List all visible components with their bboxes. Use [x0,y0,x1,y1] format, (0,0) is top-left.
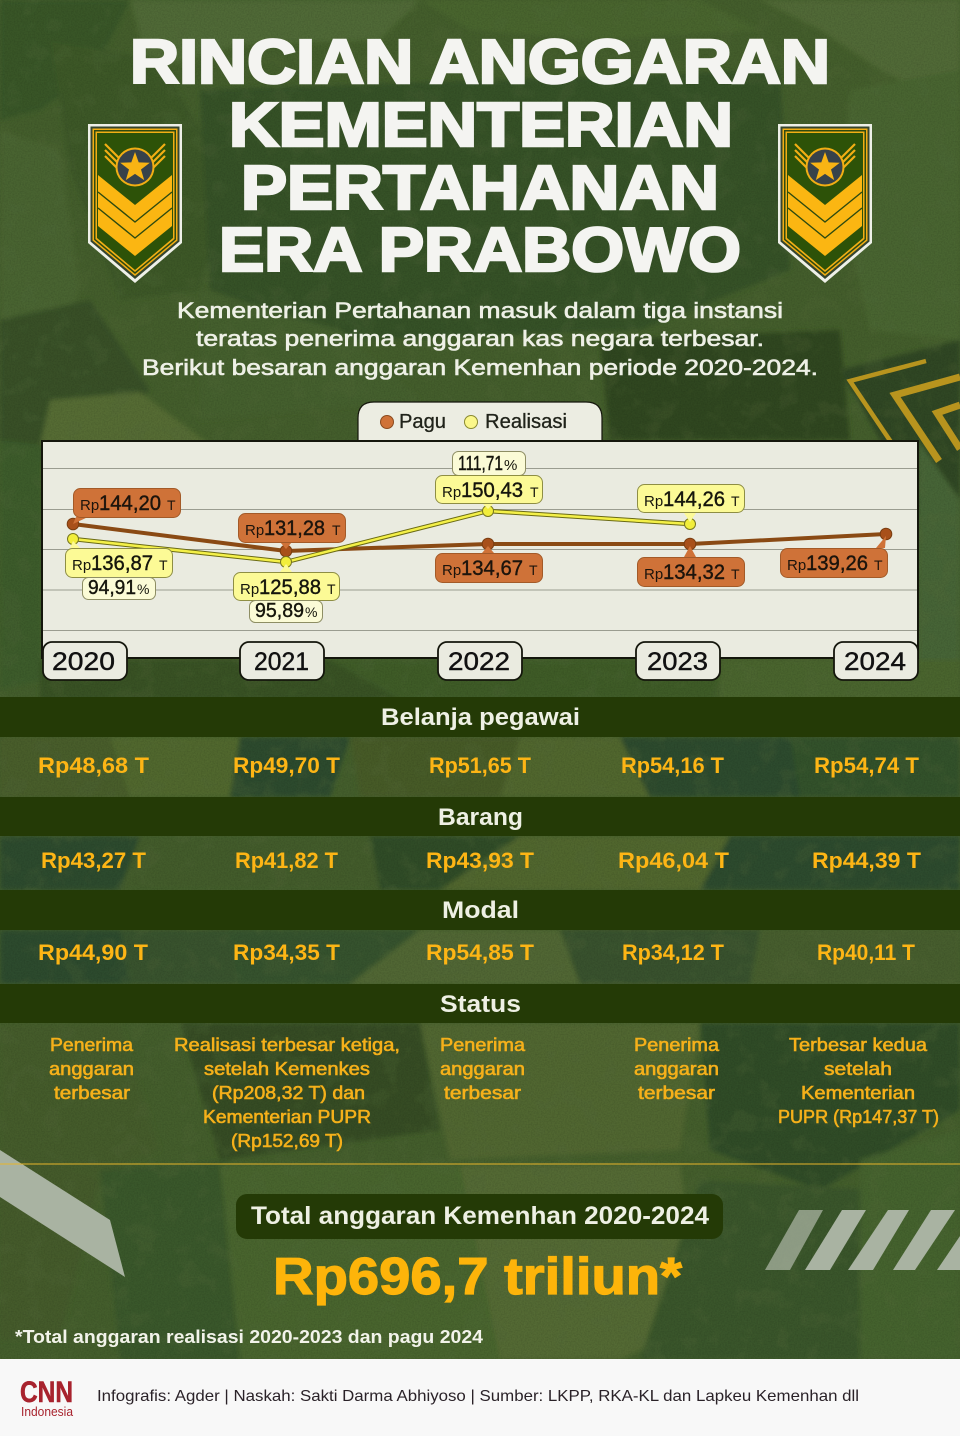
year labels: 2023 [647,648,708,676]
label: pagu 2020: T [167,497,176,513]
label: realisasi 2021: 125,88 [259,576,321,599]
label: pagu 2021: T [332,522,341,538]
label: pagu 2023: Rp [644,566,663,583]
barang values [41,848,922,873]
status text: anggaran [634,1059,719,1079]
status text: Terbesar kedua [789,1035,928,1055]
year labels: 2024 [844,648,906,676]
label: pagu 2020: 144,20 [99,492,161,515]
belanja pegawai values: Rp54,74 T [814,753,920,778]
status text: Penerima [440,1035,526,1055]
title: RINCIAN ANGGARAN [130,28,830,97]
barang values: Rp43,27 T [41,848,147,873]
realisasi markers [68,506,696,568]
label: pagu 2024: T [874,557,883,573]
logo: CNN Indonesia: Indonesia [21,1404,74,1419]
label: pagu 2023: T [731,566,740,582]
line: realisasi series [73,511,690,562]
modal values: Rp54,85 T [426,940,535,965]
label: pagu 2022 [436,546,542,582]
label: percent 2021: % [305,604,317,620]
title: ERA PRABOWO [219,216,741,285]
decorative white diagonal stripes [765,1210,960,1270]
label: percent 2022: 111,71 [458,453,503,475]
decorative gold chevrons [850,361,960,461]
legend tab: Realisasi [485,411,567,433]
credits: Infografis: Agder | Naskah: Sakti Darma Abhiyoso | Sumber: LKPP, RKA-KL dan Lapkeu Kemenhan dll [97,1388,859,1405]
barang values: Rp43,93 T [426,848,535,873]
label: percent 2022: % [504,457,517,474]
label: realisasi 2023 [638,484,744,522]
barang values: Rp44,39 T [812,848,922,873]
table section bands [0,697,960,1023]
section headings: Modal [442,897,519,924]
belanja pegawai values: Rp51,65 T [429,753,532,778]
status text: PUPR (Rp147,37 T) [778,1107,939,1127]
label: pagu 2022: Rp [442,562,461,579]
status text: anggaran [440,1059,525,1079]
label: pagu 2020: Rp [80,497,99,514]
label: pagu 2020 [73,488,180,524]
intro text: Berikut besaran anggaran Kemenhan periode 2020-2024. [142,355,818,380]
belanja pegawai values: Rp49,70 T [233,753,341,778]
title [130,28,830,285]
label: pagu 2024: Rp [787,557,806,574]
label: realisasi 2020 [66,541,172,578]
label: pagu 2022: 134,67 [461,557,523,580]
label: realisasi 2022: 150,43 [461,479,523,502]
decorative grey stripe [0,1150,125,1277]
icon: right rank badge [778,124,872,283]
label: percent 2020: % [137,581,149,597]
footer [0,1359,960,1436]
line: pagu series [73,524,886,551]
legend tab: Pagu [399,411,446,433]
label: realisasi 2020: T [159,557,168,573]
line chart panel [42,441,918,680]
logo: CNN Indonesia [20,1376,74,1419]
label: percent 2021: 95,89 [255,600,304,622]
label: realisasi 2021: T [327,581,336,597]
total pill [236,1194,723,1239]
label: pagu 2024 [780,536,888,578]
label: realisasi 2022: Rp [442,484,461,501]
label: percent 2020 [82,577,156,600]
section headings: Belanja pegawai [381,704,580,731]
intro text [142,298,818,380]
belanja pegawai values: Rp54,16 T [621,753,725,778]
modal values: Rp34,35 T [233,940,341,965]
modal values [38,940,916,965]
barang values: Rp46,04 T [618,848,730,873]
label: realisasi 2020: Rp [72,557,91,574]
label: pagu 2022: T [529,562,538,578]
total pill: Total anggaran Kemenhan 2020-2024 [251,1202,709,1230]
status text [49,1035,939,1151]
barang values: Rp41,82 T [235,848,339,873]
intro text: teratas penerima anggaran kas negara terbesar. [196,326,764,351]
title: PERTAHANAN [241,154,719,223]
label: realisasi 2022: T [530,484,539,500]
intro text: Kementerian Pertahanan masuk dalam tiga instansi [177,298,783,323]
icon: left rank badge [88,124,182,283]
status text: Realisasi terbesar ketiga, [174,1035,400,1055]
modal values: Rp34,12 T [622,940,725,965]
year labels [43,642,918,680]
status text: Penerima [50,1035,134,1055]
status text: terbesar [54,1083,130,1103]
status text: setelah [824,1059,892,1079]
status text: anggaran [49,1059,134,1079]
label: realisasi 2023: 144,26 [663,488,725,511]
modal values: Rp44,90 T [38,940,149,965]
status text: Kementerian PUPR [203,1107,371,1127]
total value: Rp696,7 triliun* [273,1248,683,1306]
year labels: 2020 [52,648,115,676]
label: pagu 2024: 139,26 [806,552,868,575]
label: realisasi 2021 [234,564,340,600]
label: realisasi 2023: Rp [644,493,663,510]
belanja pegawai values [38,753,920,778]
status text: Kementerian [801,1083,915,1103]
section headings: Status [440,991,521,1018]
label: percent 2020: 94,91 [88,577,136,599]
status text: (Rp208,32 T) dan [212,1083,365,1103]
section headings: Barang [438,804,523,831]
label: pagu 2021 [238,514,346,549]
label: pagu 2023: 134,32 [663,561,725,584]
year labels: 2022 [448,648,510,676]
label: pagu 2021: 131,28 [264,517,325,540]
status text: terbesar [444,1083,521,1103]
logo: CNN Indonesia: CNN [20,1376,73,1409]
status text: (Rp152,69 T) [231,1131,343,1151]
status text: terbesar [638,1083,715,1103]
label: realisasi 2020: 136,87 [91,552,153,575]
modal values: Rp40,11 T [817,940,916,965]
legend tab [358,402,602,441]
label: percent 2021 [250,600,322,622]
year labels: 2021 [254,648,309,676]
label: realisasi 2022 [436,476,542,509]
label: realisasi 2021: Rp [240,581,259,598]
status text: setelah Kemenkes [204,1059,370,1079]
pagu markers [67,518,892,557]
belanja pegawai values: Rp48,68 T [38,753,150,778]
label: realisasi 2023: T [731,493,740,509]
title: KEMENTERIAN [229,91,733,160]
label: pagu 2023 [638,546,744,586]
label: pagu 2021: Rp [245,522,264,539]
footnote: *Total anggaran realisasi 2020-2023 dan pagu 2024 [15,1327,483,1347]
status text: Penerima [634,1035,720,1055]
section headings [381,704,580,1018]
